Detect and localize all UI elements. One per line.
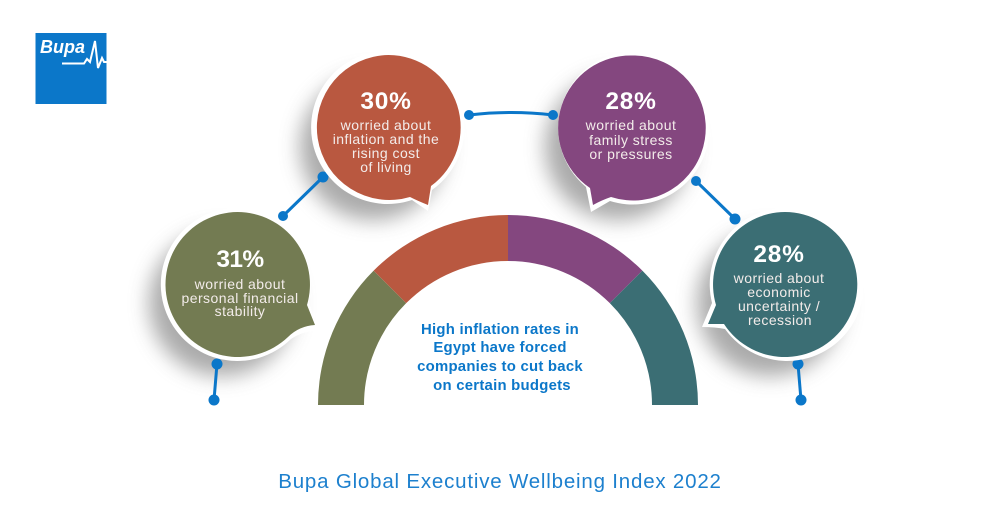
connector: purple to teal [691, 176, 740, 224]
central statement: High inflation rates in [421, 322, 579, 338]
percentage: 28% [753, 241, 805, 268]
segment: terracotta [374, 215, 508, 303]
percentage: 31% [216, 246, 264, 273]
description: worried about [733, 270, 824, 286]
description: of living [360, 159, 412, 175]
bubble: 31% personal financial stability [161, 208, 316, 361]
connector: teal down [792, 358, 806, 406]
percentage: 28% [605, 88, 657, 115]
logo: Bupa [36, 33, 107, 104]
description: worried about [585, 117, 676, 133]
segment: purple [508, 215, 642, 303]
bubble shadows [149, 74, 843, 376]
percentage: 30% [360, 88, 412, 115]
bubble: 28% family stress [558, 52, 709, 212]
description: personal financial [181, 290, 299, 306]
description: family stress [589, 132, 673, 148]
segment: teal [610, 271, 698, 405]
bubble: 30% inflation and cost of living [311, 51, 464, 211]
connector: terracotta to purple [464, 110, 558, 120]
description: rising cost [352, 145, 420, 161]
logo: Bupa: Bupa [40, 37, 85, 57]
central statement: on certain budgets [433, 378, 571, 394]
connector: olive to terracotta [278, 172, 328, 221]
description: recession [748, 312, 812, 328]
central statement: Egypt have forced [433, 340, 567, 356]
description: or pressures [589, 146, 673, 162]
central statement: companies to cut back [417, 359, 583, 375]
source title: Bupa Global Executive Wellbeing Index 2022 [278, 470, 722, 493]
description: stability [215, 303, 265, 319]
description: economic [747, 284, 811, 300]
description: uncertainty / [738, 298, 820, 314]
connector: olive down [208, 358, 222, 406]
semicircle chart [318, 215, 698, 405]
bubble: 28% economic uncertainty [702, 208, 864, 361]
description: worried about [194, 276, 285, 292]
description: inflation and the [333, 131, 439, 147]
description: worried about [340, 117, 431, 133]
segment: olive [318, 271, 406, 405]
